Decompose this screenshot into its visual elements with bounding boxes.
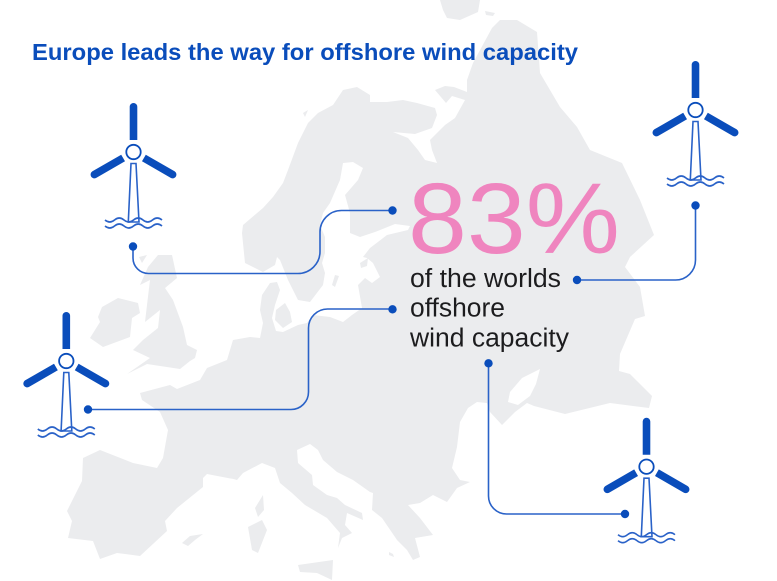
map: Hebrides bbox=[139, 255, 147, 263]
map: Ireland bbox=[90, 298, 140, 347]
map: Crete bbox=[389, 552, 394, 557]
connector: top-right turbine to statistic bbox=[573, 201, 700, 284]
statistic: 83%: 83% bbox=[408, 163, 620, 275]
map: Great Britain bbox=[127, 255, 197, 374]
map: Sicily bbox=[298, 560, 333, 580]
connector: bottom-right turbine to statistic bbox=[484, 359, 629, 518]
icon: wind turbine top-right bbox=[651, 61, 740, 186]
map: Corsica bbox=[255, 495, 264, 517]
map: Danish islands bbox=[275, 303, 292, 328]
map: mainland Europe and Scandinavia bbox=[67, 20, 654, 560]
icon: wind turbine top-left bbox=[89, 103, 178, 228]
caption line 2: offshore bbox=[410, 294, 505, 322]
map: Sardinia bbox=[248, 520, 267, 553]
map: Arctic island bbox=[440, 0, 480, 20]
caption line 3: wind capacity bbox=[409, 324, 569, 352]
map: small Arctic islet bbox=[485, 11, 495, 16]
title: Europe leads the way for offshore wind capacity bbox=[32, 39, 578, 65]
map: Balearic Islands bbox=[182, 534, 203, 546]
caption line 1: of the worlds bbox=[410, 265, 561, 293]
map: Europe silhouette bbox=[67, 0, 654, 580]
icon: wind turbine left bbox=[22, 312, 111, 437]
map: Saaremaa bbox=[360, 258, 368, 268]
connector: top-left turbine to statistic bbox=[129, 206, 397, 274]
statistic caption bbox=[409, 265, 569, 352]
map: Lofoten islets bbox=[303, 110, 308, 117]
map: Sea of Azov cut-out bbox=[508, 369, 540, 405]
icon: wind turbine bottom-right bbox=[602, 418, 691, 543]
map: Gotland bbox=[332, 275, 339, 287]
connector: left turbine to statistic bbox=[84, 305, 397, 414]
